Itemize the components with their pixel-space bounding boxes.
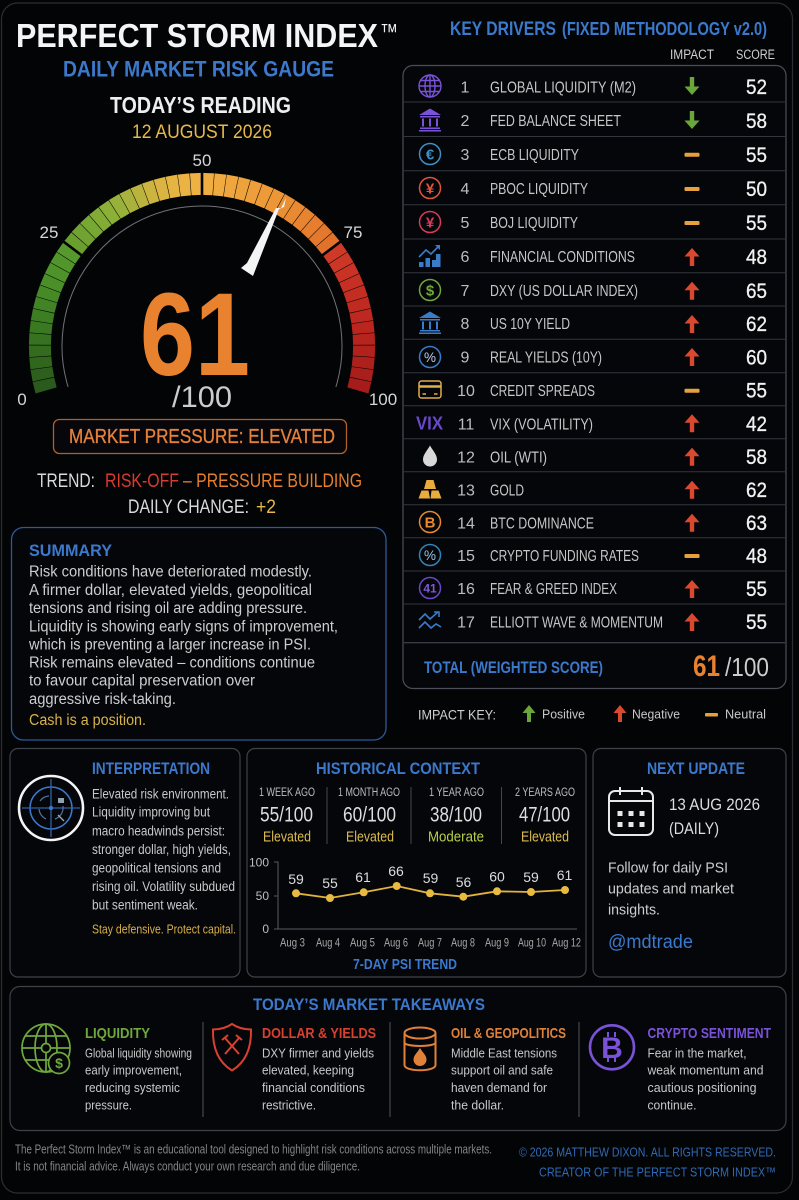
- icon: globe: [419, 75, 441, 97]
- takeaway: crypto sentiment: Fear in the market,: [648, 1045, 746, 1060]
- icon: shield: [213, 1024, 251, 1070]
- row 3 ecb liquidity: 55: [746, 144, 767, 167]
- follow text: insights.: [608, 901, 660, 918]
- interpretation call to action: Stay defensive. Protect capital.: [92, 921, 236, 936]
- icon: percent: %: [424, 548, 436, 563]
- takeaway: dollar and yields: financial conditions: [262, 1080, 365, 1095]
- icon: vix: VIX: [416, 413, 443, 433]
- line chart: 7-day trend: Aug 8: [451, 938, 475, 950]
- takeaway: crypto sentiment: weak momentum and: [647, 1063, 764, 1078]
- summary text: A firmer dollar, elevated yields, geopolitical: [29, 582, 312, 599]
- row 3 ecb liquidity: 3: [461, 147, 470, 164]
- row 11 vix: VIX (VOLATILITY): [490, 416, 593, 433]
- line chart: 7-day trend: 50: [256, 889, 269, 903]
- disclaimer: The Perfect Storm Index™ is an educational tool designed to highlight risk conditions across multiple markets.: [15, 1142, 492, 1156]
- icon: bank purple: [419, 108, 441, 132]
- icon: fear and greed gauge: 41: [423, 582, 437, 596]
- history: 1 year ago: Moderate: [428, 830, 484, 846]
- line chart: 7-day trend: 61: [557, 867, 572, 883]
- impact key legend: Positive: [542, 707, 585, 722]
- disclaimer: [15, 1142, 492, 1174]
- impact key legend: IMPACT KEY:: [418, 706, 496, 722]
- follow text: [608, 860, 735, 918]
- takeaway: crypto sentiment: continue.: [648, 1097, 696, 1112]
- impact key legend: [418, 705, 766, 722]
- row 13 gold: 62: [746, 479, 767, 502]
- row 15 crypto funding rates: [420, 544, 767, 568]
- next update heading: NEXT UPDATE: [647, 760, 745, 778]
- risk gauge: [17, 151, 397, 409]
- row 7 dxy: 7: [461, 283, 470, 300]
- history: 2 years ago: [515, 787, 575, 846]
- line chart: 7-day trend: 56: [456, 874, 471, 890]
- chart title: 7-DAY PSI TREND: [353, 957, 457, 973]
- row 8 us 10y yield: 8: [461, 316, 470, 333]
- takeaway: oil and geopolitics: the dollar.: [451, 1097, 504, 1112]
- gauge scale labels: [17, 151, 397, 409]
- takeaway: dollar and yields: elevated, keeping: [262, 1063, 354, 1078]
- line chart: 7-day trend: 60: [489, 869, 505, 885]
- title: ™: [380, 19, 398, 44]
- row 15 crypto funding rates: 48: [746, 545, 767, 568]
- row 6 financial conditions: [419, 245, 767, 269]
- takeaway: liquidity: pressure.: [85, 1097, 132, 1112]
- row 12 oil: 12: [457, 449, 475, 466]
- follow text: Follow for daily PSI: [608, 860, 728, 877]
- takeaway: liquidity: [22, 1024, 192, 1112]
- takeaway: oil and geopolitics: OIL & GEOPOLITICS: [451, 1025, 566, 1042]
- takeaway: liquidity: reducing systemic: [85, 1080, 180, 1095]
- history: 2 years ago: 47/100: [519, 804, 570, 827]
- row 9 real yields: [420, 346, 767, 370]
- takeaway: dollar and yields: restrictive.: [262, 1097, 316, 1112]
- copyright: [519, 1145, 776, 1180]
- panel: key drivers heading: KEY DRIVERS: [450, 19, 556, 40]
- takeaway: liquidity: early improvement,: [85, 1063, 182, 1078]
- interpretation text: geopolitical tensions and: [92, 860, 221, 875]
- takeaway: crypto sentiment: [590, 1025, 771, 1112]
- interpretation text: rising oil. Volatility subdued: [92, 879, 235, 894]
- row 17 elliott wave: 17: [457, 614, 475, 631]
- interpretation text: macro headwinds persist:: [92, 823, 225, 838]
- next update date: 13 AUG 2026: [669, 795, 760, 814]
- row 10 credit spreads: 10: [457, 383, 475, 400]
- score denominator: /100: [172, 381, 232, 414]
- row 9 real yields: REAL YIELDS (10Y): [490, 350, 602, 367]
- icon: bank blue: [419, 312, 441, 334]
- row 4 pboc liquidity: PBOC LIQUIDITY: [490, 181, 588, 198]
- history: 1 week ago: [259, 787, 315, 846]
- total weighted score: /100: [725, 652, 769, 682]
- line chart: 7-day trend: Aug 7: [418, 938, 442, 950]
- line chart: 7-day trend: Aug 5: [350, 938, 375, 950]
- row 5 boj liquidity: BOJ LIQUIDITY: [490, 215, 578, 232]
- summary heading: SUMMARY: [29, 541, 113, 560]
- history: 1 year ago: 38/100: [430, 804, 482, 827]
- line chart: 7-day trend: 100: [249, 856, 269, 870]
- takeaway: dollar and yields: DXY firmer and yields: [262, 1045, 374, 1060]
- history: 2 years ago: 2 YEARS AGO: [515, 787, 575, 799]
- icon: percent: %: [424, 350, 436, 365]
- line chart: 7-day trend: [249, 856, 581, 950]
- takeaway: dollar and yields: [213, 1024, 376, 1112]
- icon: yen: [420, 212, 440, 232]
- row 7 dxy: [420, 280, 767, 303]
- gauge scale labels: 75: [344, 223, 362, 242]
- icon: gold bars: [418, 480, 442, 498]
- icon: percent: [420, 544, 440, 566]
- row 15 crypto funding rates: CRYPTO FUNDING RATES: [490, 548, 639, 565]
- panel: historical context: [247, 748, 586, 977]
- row 8 us 10y yield: [419, 312, 767, 336]
- row 9 real yields: 9: [461, 350, 470, 367]
- row 5 boj liquidity: 55: [746, 212, 767, 235]
- line chart: 7-day trend: Aug 3: [280, 938, 305, 950]
- takeaway: liquidity: Global liquidity showing: [85, 1045, 192, 1060]
- row 14 btc dominance: 14: [457, 515, 475, 532]
- icon: bitcoin: B: [601, 1032, 623, 1065]
- row 4 pboc liquidity: 4: [461, 181, 470, 198]
- interpretation text: but sentiment weak.: [92, 897, 198, 912]
- row 14 btc dominance: BTC DOMINANCE: [490, 515, 594, 532]
- row 8 us 10y yield: US 10Y YIELD: [490, 316, 570, 333]
- icon: fear and greed gauge: [420, 578, 440, 598]
- takeaway: crypto sentiment: cautious positioning: [648, 1080, 756, 1095]
- panel: interpretation: [10, 748, 240, 977]
- total weighted score: [424, 650, 769, 683]
- gauge scale labels: 50: [193, 151, 211, 170]
- row 8 us 10y yield: 62: [746, 313, 767, 336]
- summary text: to favour capital preservation over: [29, 673, 255, 690]
- icon: globe with dollar: $: [55, 1055, 63, 1071]
- interpretation text: [92, 786, 235, 912]
- row 14 btc dominance: [420, 512, 767, 535]
- row 17 elliott wave: 55: [746, 611, 767, 634]
- history: 1 year ago: [428, 787, 484, 846]
- row 2 fed balance sheet: [419, 108, 767, 133]
- row 16 fear and greed: 55: [746, 578, 767, 601]
- icon: waves: [419, 612, 441, 628]
- line chart: 7-day trend: 55: [322, 875, 338, 891]
- total weighted score: 61: [693, 650, 720, 683]
- line chart: 7-day trend: Aug 9: [485, 938, 509, 950]
- today's reading heading: TODAY’S READING: [110, 92, 291, 118]
- line chart: 7-day trend: 0: [262, 922, 269, 936]
- summary text: Risk remains elevated – conditions continue: [29, 655, 315, 672]
- row 3 ecb liquidity: ECB LIQUIDITY: [490, 147, 579, 164]
- next update date: [669, 795, 760, 838]
- takeaway: crypto sentiment: CRYPTO SENTIMENT: [648, 1025, 771, 1042]
- icon: bitcoin: B: [425, 514, 436, 532]
- column headers: [670, 47, 775, 62]
- row 16 fear and greed: [420, 578, 767, 601]
- row 10 credit spreads: [419, 380, 767, 402]
- gauge needle: [241, 198, 286, 276]
- history: 1 year ago: 1 YEAR AGO: [429, 787, 484, 799]
- icon: bitcoin: [590, 1025, 634, 1069]
- row 1 global liquidity: GLOBAL LIQUIDITY (M2): [490, 80, 636, 97]
- row 13 gold: 13: [457, 482, 475, 499]
- summary text: Liquidity is showing early signs of improvement,: [29, 618, 338, 635]
- trend line: [37, 471, 362, 492]
- panel: summary: [12, 528, 386, 740]
- line chart: 7-day trend: Aug 10: [518, 938, 546, 950]
- line chart: 7-day trend: 59: [523, 869, 539, 885]
- history: 1 week ago: 55/100: [260, 804, 313, 827]
- history: 1 month ago: 60/100: [343, 804, 396, 827]
- line chart: 7-day trend: Aug 12: [552, 938, 581, 950]
- trend line: – PRESSURE BUILDING: [183, 471, 362, 492]
- row 17 elliott wave: ELLIOTT WAVE & MOMENTUM: [490, 614, 663, 631]
- interpretation heading: INTERPRETATION: [92, 760, 210, 778]
- row 9 real yields: 60: [746, 346, 767, 370]
- panel: key drivers heading: [450, 19, 767, 40]
- panel: next update: [593, 748, 786, 977]
- trend line: TREND:: [37, 471, 95, 492]
- icon: yen: ¥: [426, 214, 435, 232]
- history: 1 week ago: Elevated: [263, 830, 311, 846]
- row 7 dxy: DXY (US DOLLAR INDEX): [490, 283, 638, 300]
- history: 1 month ago: [338, 787, 400, 846]
- icon: yuan: [420, 178, 440, 198]
- column headers: SCORE: [736, 47, 775, 62]
- icon: dollar: $: [426, 282, 435, 300]
- daily change: +2: [256, 497, 276, 518]
- trend line: RISK-OFF: [105, 471, 179, 492]
- icon: calendar: [609, 787, 653, 835]
- gauge scale labels: 0: [17, 390, 27, 409]
- total weighted score: TOTAL (WEIGHTED SCORE): [424, 659, 603, 677]
- icon: yuan: ¥: [426, 180, 435, 198]
- row 12 oil: [423, 446, 767, 469]
- history: 1 month ago: Elevated: [346, 830, 394, 846]
- disclaimer: It is not financial advice. Always conduct your own research and due diligence.: [15, 1160, 360, 1174]
- icon: bitcoin: [420, 512, 440, 532]
- panel: drivers table: [403, 66, 786, 688]
- line chart: 7-day trend: 66: [388, 863, 404, 879]
- summary text: [28, 564, 338, 708]
- icon: oil drop: [423, 446, 437, 467]
- row 1 global liquidity: 1: [461, 80, 470, 97]
- row 6 financial conditions: FINANCIAL CONDITIONS: [490, 249, 635, 266]
- takeaway: oil and geopolitics: Middle East tensions: [451, 1045, 557, 1060]
- row 13 gold: GOLD: [490, 482, 524, 499]
- icon: oil barrel: [404, 1028, 436, 1070]
- takeaway: oil and geopolitics: [404, 1025, 566, 1112]
- interpretation text: Elevated risk environment.: [92, 786, 229, 801]
- row 6 financial conditions: 6: [461, 249, 470, 266]
- takeaway: liquidity: LIQUIDITY: [85, 1025, 150, 1042]
- row 17 elliott wave: [419, 611, 767, 634]
- takeaway: oil and geopolitics: haven demand for: [451, 1080, 548, 1095]
- row 15 crypto funding rates: 15: [457, 548, 475, 565]
- row 10 credit spreads: 55: [746, 380, 767, 402]
- line chart: 7-day trend: 61: [355, 869, 371, 885]
- row 4 pboc liquidity: [420, 178, 767, 201]
- subtitle: DAILY MARKET RISK GAUGE: [63, 56, 334, 82]
- line chart: 7-day trend: Aug 4: [316, 938, 340, 950]
- row 1 global liquidity: [419, 75, 767, 99]
- row 14 btc dominance: 63: [746, 512, 767, 535]
- row 2 fed balance sheet: 2: [461, 113, 470, 130]
- follow text: updates and market: [608, 880, 735, 897]
- row 10 credit spreads: CREDIT SPREADS: [490, 383, 595, 400]
- takeaway: oil and geopolitics: support oil and safe: [451, 1063, 553, 1078]
- panel: market takeaways: [10, 986, 786, 1130]
- row 2 fed balance sheet: 58: [746, 110, 767, 133]
- summary text: Risk conditions have deteriorated modestly.: [29, 564, 312, 581]
- line chart: 7-day trend: Aug 6: [384, 938, 408, 950]
- title: PERFECT STORM INDEX: [16, 17, 378, 54]
- row 4 pboc liquidity: 50: [746, 178, 767, 201]
- big score: 61: [140, 269, 250, 401]
- row 2 fed balance sheet: FED BALANCE SHEET: [490, 113, 621, 130]
- interpretation text: stronger dollar, high yields,: [92, 842, 231, 857]
- summary text: aggressive risk-taking.: [29, 691, 176, 708]
- icon: credit card: [419, 381, 441, 398]
- next update date: (DAILY): [669, 819, 719, 838]
- impact key legend: Neutral: [725, 707, 766, 722]
- impact key legend: Negative: [632, 707, 680, 722]
- takeaway: dollar and yields: DOLLAR & YIELDS: [262, 1025, 376, 1042]
- row 11 vix: [416, 413, 767, 436]
- icon: bar chart: [419, 245, 440, 267]
- row 12 oil: 58: [746, 446, 767, 469]
- column headers: IMPACT: [670, 47, 714, 62]
- row 11 vix: 11: [458, 416, 474, 433]
- line chart: 7-day trend: 59: [423, 870, 438, 886]
- summary text: tensions and rising oil are adding pressure.: [29, 600, 307, 617]
- icon: euro: [420, 144, 440, 164]
- history: 2 years ago: Elevated: [521, 830, 569, 846]
- row 16 fear and greed: 16: [457, 581, 475, 598]
- gauge scale labels: 100: [369, 390, 397, 409]
- line chart: 7-day trend: 59: [288, 871, 304, 887]
- row 13 gold: [418, 479, 767, 502]
- historical context heading: HISTORICAL CONTEXT: [316, 759, 481, 778]
- icon: percent: [420, 346, 440, 368]
- history: 1 week ago: 1 WEEK AGO: [259, 787, 315, 799]
- interpretation text: Liquidity improving but: [92, 805, 210, 820]
- takeaways heading: TODAY’S MARKET TAKEAWAYS: [253, 995, 485, 1014]
- market pressure badge: MARKET PRESSURE: ELEVATED: [69, 426, 335, 448]
- summary text: which is preventing a larger increase in PSI.: [28, 636, 311, 653]
- market pressure badge: [54, 420, 346, 454]
- icon: dollar: [420, 280, 440, 300]
- icon: globe with dollar: [22, 1024, 70, 1074]
- row 7 dxy: 65: [746, 280, 767, 303]
- icon: euro: €: [426, 146, 435, 164]
- summary conclusion: Cash is a position.: [29, 712, 146, 729]
- history: 1 month ago: 1 MONTH AGO: [338, 787, 400, 799]
- gauge scale labels: 25: [40, 223, 58, 242]
- social handle: @mdtrade: [608, 932, 693, 953]
- row 5 boj liquidity: [420, 212, 767, 235]
- reading date: 12 AUGUST 2026: [132, 122, 272, 143]
- row 3 ecb liquidity: [420, 144, 767, 167]
- icon: radar: [19, 776, 83, 840]
- row 16 fear and greed: FEAR & GREED INDEX: [490, 581, 617, 598]
- daily change: DAILY CHANGE:: [128, 497, 249, 518]
- row 11 vix: 42: [746, 413, 767, 436]
- row 12 oil: OIL (WTI): [490, 449, 547, 466]
- row 5 boj liquidity: 5: [461, 215, 470, 232]
- row 1 global liquidity: 52: [746, 76, 767, 99]
- row 6 financial conditions: 48: [746, 246, 767, 269]
